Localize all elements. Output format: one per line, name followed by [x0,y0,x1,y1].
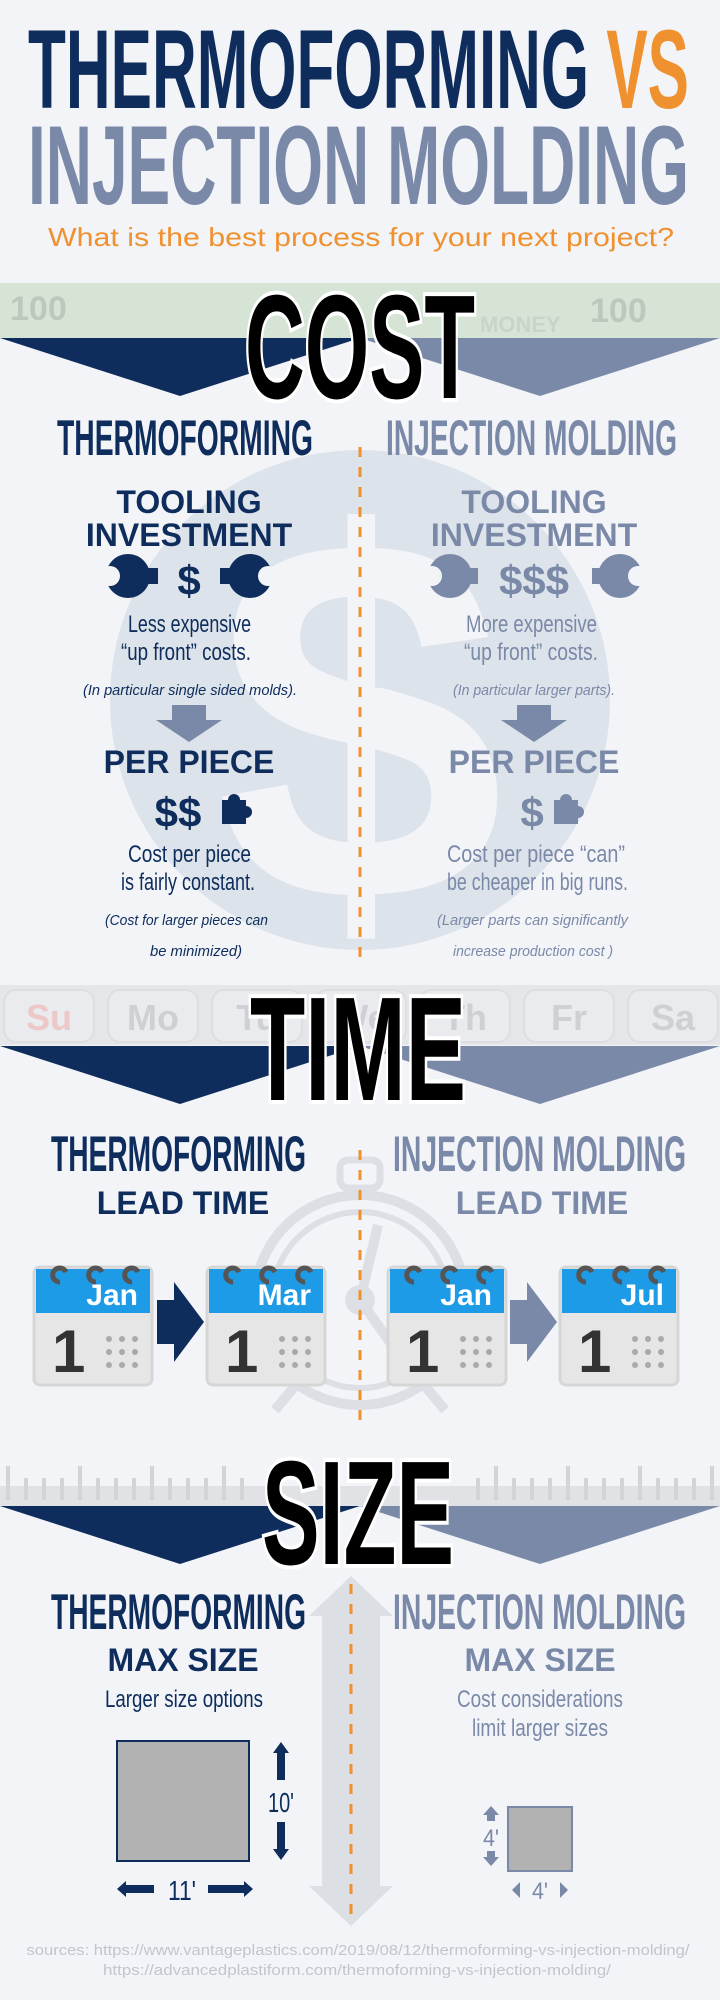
panel: size injection [393,1584,686,1905]
banner: cost [0,265,720,430]
panel: cost thermoforming: “up front” costs. [121,639,251,666]
heading: TIME: TIME [250,967,466,1132]
divider: size [350,1584,352,1920]
panel: cost thermoforming: (In particular single sided molds). [83,682,297,699]
panel: time injection: LEAD TIME [456,1185,628,1221]
panel: cost injection molding: PER PIECE [449,744,619,780]
icon: calendar Jan right: 1 [406,1318,439,1385]
sources [26,1942,690,1979]
arrow down [501,705,567,742]
divider: time [358,1150,362,1420]
banner: time: Su [26,997,72,1038]
icon: calendar Jan right: Jan [440,1279,492,1312]
arrow: 4 ft horizontal: 4' [532,1878,548,1905]
icon: calendar Mar: 1 [225,1318,258,1385]
sources: https://advancedplastiform.com/thermoforming-vs-injection-molding/ [103,1962,612,1979]
shape: small square [508,1807,572,1871]
banner: time [0,967,720,1132]
banner: time: Sa [651,997,696,1038]
panel: size injection: Cost considerations [457,1686,623,1713]
panel: cost thermoforming: INVESTMENT [86,517,293,553]
arrow: 4 ft vertical [483,1806,499,1866]
banner: size [0,1431,720,1596]
panel: time thermoforming [51,1126,306,1221]
background: dollar circle: $ [215,430,505,1011]
panel: cost injection molding: More expensive [466,611,597,638]
panel: size injection: limit larger sizes [472,1715,608,1742]
sources: sources: https://www.vantageplastics.com/2019/08/12/thermoforming-vs-injection-molding/ [26,1942,690,1959]
arrow: 10 ft: 10' [268,1787,294,1818]
panel: cost injection molding: (Larger parts can significantly [437,912,629,929]
panel: cost injection molding: $$$ [499,557,569,604]
title [28,7,689,228]
icon: puzzle [222,794,252,824]
arrow: 10 ft [268,1742,294,1860]
panel: cost thermoforming: THERMOFORMING [57,410,313,466]
background: clock [255,1160,465,1410]
shape: large square [117,1741,249,1861]
icon: puzzle [554,794,584,824]
panel: cost thermoforming: PER PIECE [104,744,274,780]
panel: size thermoforming [51,1584,306,1906]
icon: calendar Jan [34,1267,152,1385]
panel: cost thermoforming: $$ [155,789,201,836]
panel: cost thermoforming: Less expensive [128,611,251,638]
arrow: jan to mar [157,1282,204,1362]
panel: cost injection molding: $ [520,789,544,836]
arrow: jan to jul [510,1282,557,1362]
panel: cost thermoforming: TOOLING [116,484,262,520]
banner: time: Fr [551,997,587,1038]
panel: cost thermoforming: Cost per piece [128,841,251,868]
panel: cost injection molding [386,410,677,960]
icon: wrench left [422,554,478,598]
icon: calendar Jan right [388,1267,506,1385]
panel: size thermoforming: MAX SIZE [107,1642,259,1678]
icon: wrench right [220,554,278,598]
icon: calendar Jan: 1 [52,1318,85,1385]
arrow: 4 ft horizontal [512,1878,568,1905]
panel: cost injection molding: increase production cost ) [453,943,613,960]
banner: cost: 100 [590,292,647,330]
icon: calendar Jul: Jul [621,1279,664,1312]
heading: COST: COST [245,265,475,430]
panel: cost thermoforming: (Cost for larger pieces can [105,912,268,929]
icon: calendar Jan: Jan [86,1279,138,1312]
banner: time: Mo [127,997,179,1038]
panel: cost thermoforming: $ [177,557,201,604]
icon: calendar Mar: Mar [258,1279,311,1312]
panel: cost injection molding: “up front” costs. [464,639,598,666]
heading: SIZE: SIZE [262,1431,454,1596]
banner: cost: 100 [10,290,67,328]
arrow: big vertical double arrow [309,1576,393,1926]
panel: cost thermoforming: be minimized) [150,943,242,960]
panel: cost thermoforming: is fairly constant. [121,869,255,896]
banner: time: We [334,997,388,1038]
arrow: 4 ft vertical: 4' [483,1825,499,1852]
panel: cost injection molding: Cost per piece “can” [447,841,625,868]
icon: calendar Mar [207,1267,325,1385]
icon: wrench right [592,554,648,598]
panel: size thermoforming: Larger size options [105,1686,263,1713]
panel: cost injection molding: be cheaper in big runs. [447,869,628,896]
subtitle: What is the best process for your next project? [48,222,674,252]
panel: size thermoforming: THERMOFORMING [51,1584,306,1640]
divider: cost [358,447,362,960]
banner: cost: MONEY [480,312,561,337]
panel: size injection: MAX SIZE [464,1642,616,1678]
panel: time injection [393,1126,686,1221]
arrow: 11 ft [117,1875,253,1906]
icon: wrench left [100,554,158,598]
panel: cost injection molding: TOOLING [461,484,607,520]
panel: cost injection molding: (In particular larger parts). [453,682,615,699]
arrow: 11 ft: 11' [168,1875,196,1906]
banner: time: Th [443,997,487,1038]
banner: time: Tu [236,997,278,1038]
panel: time thermoforming: THERMOFORMING [51,1126,306,1182]
icon: calendar Jul [560,1267,678,1385]
arrow down [156,705,222,742]
background: dollar circle [110,430,610,1011]
icon: calendar Jul: 1 [578,1318,611,1385]
panel: time thermoforming: LEAD TIME [97,1185,269,1221]
panel: cost injection molding: INVESTMENT [431,517,638,553]
panel: cost thermoforming [57,410,313,960]
